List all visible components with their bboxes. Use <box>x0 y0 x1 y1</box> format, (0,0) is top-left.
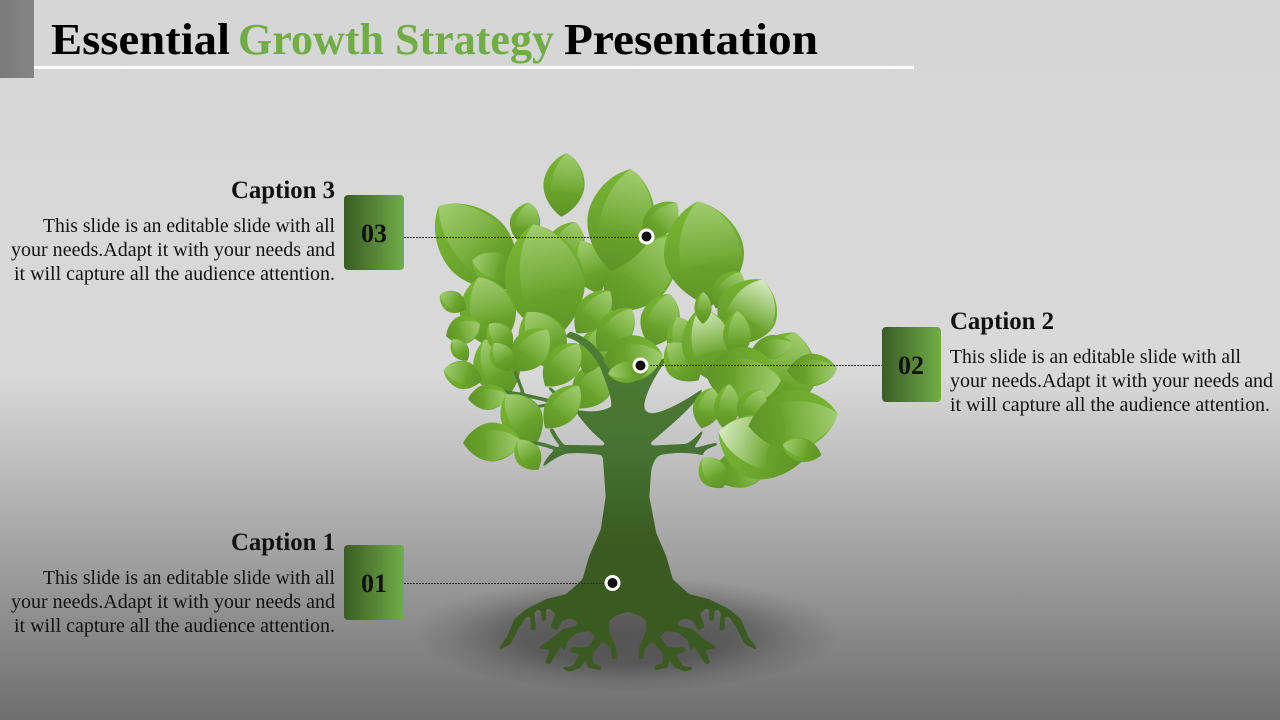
trunk and roots <box>500 460 756 671</box>
marker: 01 <box>606 576 619 590</box>
number box 02 <box>882 327 941 402</box>
number box 01 <box>344 545 404 620</box>
caption 3 text: This slide is an editable slide with all <box>43 215 335 237</box>
caption 2 text: This slide is an editable slide with all <box>950 346 1241 368</box>
caption 3 text <box>11 215 335 285</box>
panel: caption 3 <box>11 177 404 285</box>
caption 1 text <box>11 567 335 637</box>
caption 3 heading: Caption 3 <box>231 177 335 204</box>
caption 1 heading: Caption 1 <box>231 529 335 556</box>
back leaves <box>413 163 829 424</box>
caption 2 text: it will capture all the audience attention. <box>950 394 1270 416</box>
title <box>51 15 818 64</box>
number box 03: 03 <box>361 219 387 248</box>
connector: 01 <box>404 582 605 584</box>
caption 3 text: it will capture all the audience attention. <box>14 263 335 285</box>
marker: 02 <box>634 359 647 372</box>
title tab <box>0 0 34 78</box>
caption 1 text: your needs.Adapt it with your needs and <box>11 591 335 613</box>
title underline <box>34 66 914 69</box>
marker: 03 <box>640 230 653 243</box>
front leaves <box>440 151 842 496</box>
connector: 03 <box>404 236 640 238</box>
caption 2 text <box>950 346 1273 416</box>
title: Growth Strategy <box>238 15 554 64</box>
connector: 02 <box>650 364 882 366</box>
caption 2 text: your needs.Adapt it with your needs and <box>950 370 1273 392</box>
title: Essential <box>51 15 230 64</box>
panel: caption 2 <box>882 308 1273 416</box>
caption 1 text: This slide is an editable slide with all <box>43 567 335 589</box>
number box 02: 02 <box>898 351 924 380</box>
ground shadow <box>412 576 842 692</box>
panel: caption 1 <box>11 529 404 637</box>
caption 1 text: it will capture all the audience attention. <box>14 615 335 637</box>
tree <box>413 151 842 671</box>
title: Presentation <box>564 15 818 64</box>
caption 2 heading: Caption 2 <box>950 308 1054 335</box>
number box 03 <box>344 195 404 270</box>
crown branches <box>542 332 717 473</box>
number box 01: 01 <box>361 569 387 598</box>
small branches <box>496 372 563 451</box>
trunk and branches <box>496 332 756 671</box>
caption 3 text: your needs.Adapt it with your needs and <box>11 239 335 261</box>
